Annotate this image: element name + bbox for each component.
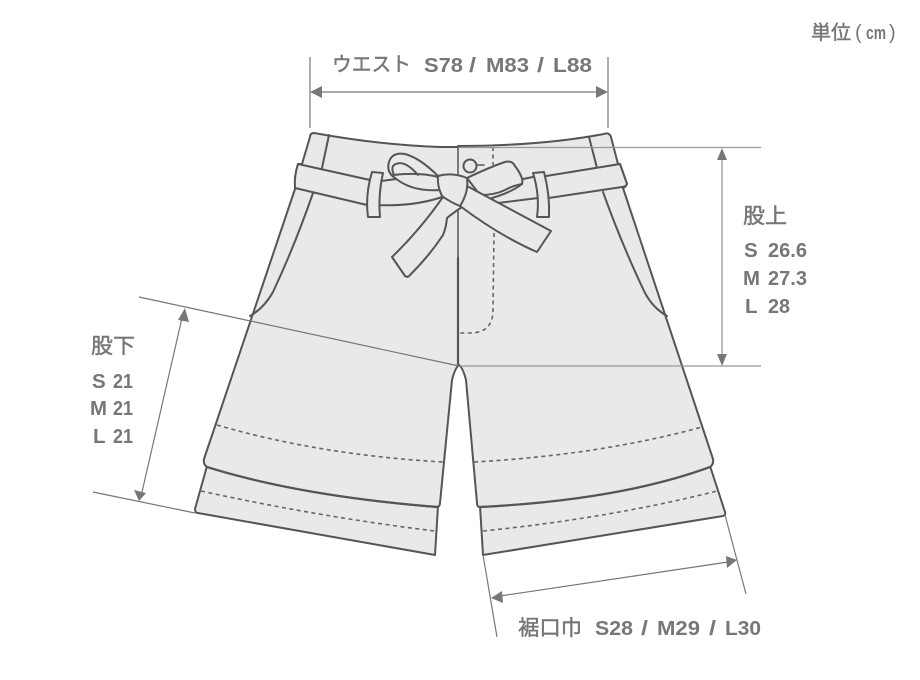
waist measurement [310, 48, 608, 128]
unit label: ( [855, 22, 862, 44]
hem width measurement [483, 515, 761, 642]
inseam dimension lines [93, 297, 459, 513]
waist label: M83 [486, 54, 529, 77]
unit label: ) [889, 22, 896, 44]
button [464, 160, 484, 172]
hem label: M29 [657, 617, 700, 640]
rise dimension lines [459, 148, 761, 366]
rise measurement [459, 148, 807, 366]
rise arrowheads [717, 148, 727, 366]
waist label: / [537, 54, 544, 77]
inseam measurement [90, 297, 459, 513]
inseam label [90, 330, 135, 448]
hem label: S28 [595, 617, 633, 640]
ribbon bow [388, 154, 551, 277]
inseam label: 21 [113, 370, 133, 393]
belt [295, 164, 627, 205]
fly stitching [458, 147, 494, 333]
rise label: 27.3 [768, 267, 807, 290]
rise label: 股上 [743, 200, 787, 230]
hem dimension lines [483, 515, 746, 637]
waist label: ウエスト [332, 48, 411, 77]
rise label: M [743, 267, 760, 290]
waist label: / [469, 54, 476, 77]
waist label [332, 48, 592, 77]
hem lines [207, 467, 710, 507]
hem label: / [709, 617, 716, 640]
hem stitching [201, 425, 717, 531]
rise label: 26.6 [768, 239, 807, 262]
inseam label: 21 [113, 397, 133, 420]
inseam label: S [92, 370, 106, 393]
rise label: S [744, 239, 758, 262]
inseam label: 股下 [91, 330, 135, 360]
hem label: / [641, 617, 648, 640]
waist label: L88 [553, 54, 592, 77]
waistband side seams [322, 135, 597, 168]
hem label [518, 612, 761, 642]
inseam arrowheads [134, 308, 189, 501]
hem label: L30 [725, 617, 761, 640]
waist label: S78 [424, 54, 463, 77]
left leg lower layer [195, 466, 438, 555]
hem arrowheads [491, 556, 737, 603]
waist arrowheads [310, 86, 608, 98]
belt loops [367, 172, 383, 217]
inseam label: M [90, 397, 107, 420]
rise label: L [745, 295, 758, 318]
unit label: cm [866, 23, 886, 43]
hem label: 裾口巾 [518, 612, 582, 642]
unit label [811, 16, 896, 45]
rise label [743, 200, 807, 318]
right leg lower layer [480, 466, 725, 555]
inseam label: L [93, 425, 106, 448]
inseam label: 21 [113, 425, 133, 448]
waist dimension lines [310, 57, 608, 128]
shorts illustration [195, 133, 725, 555]
pockets [250, 192, 667, 316]
shorts body [204, 133, 713, 507]
centre front seam [457, 147, 459, 258]
rise label: 28 [768, 295, 790, 318]
unit label: 単位 [811, 16, 851, 45]
